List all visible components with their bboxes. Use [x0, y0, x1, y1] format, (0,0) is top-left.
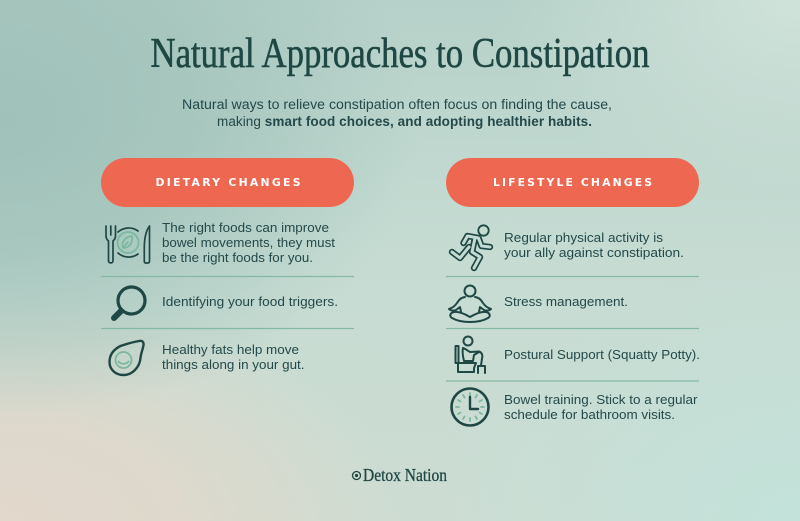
text: healthy fats: things along in your gut. — [162, 357, 304, 372]
text: healthy fats — [162, 342, 304, 372]
icon: clock — [452, 388, 488, 426]
text: physical activity: your ally against constipation. — [504, 245, 684, 260]
icon: plate with fork, knife and leaf — [106, 226, 150, 263]
panel: dietary changes — [101, 158, 354, 375]
text: physical activity — [504, 230, 684, 260]
heading pill: lifestyle changes: LIFESTYLE CHANGES — [493, 176, 652, 189]
text: healthy fats: Healthy fats help move — [162, 342, 299, 357]
heading pill: lifestyle changes — [446, 158, 699, 207]
icon: running person — [452, 225, 490, 268]
text: bowel training — [504, 392, 698, 422]
logo: Detox Nation — [363, 465, 447, 485]
text: right foods — [162, 220, 335, 265]
text: stress: Stress management. — [504, 294, 628, 309]
icon: meditating person — [449, 286, 491, 322]
heading pill: dietary changes — [101, 158, 354, 207]
icon: avocado — [110, 341, 144, 375]
intro text: Natural ways to relieve constipation often focus on finding the cause, — [182, 97, 612, 112]
intro text — [182, 97, 612, 129]
text: food triggers: Identifying your food triggers. — [162, 294, 338, 309]
title: Natural Approaches to Constipation — [150, 31, 650, 77]
text: right foods: bowel movements, they must — [162, 235, 335, 250]
panel: lifestyle changes — [446, 158, 700, 426]
text: bowel training: schedule for bathroom visits. — [504, 407, 675, 422]
heading pill: dietary changes: DIETARY CHANGES — [156, 176, 300, 189]
text: postural support: Postural Support (Squatty Potty). — [504, 347, 700, 362]
text: bowel training: Bowel training. Stick to a regular — [504, 392, 698, 407]
text: right foods: be the right foods for you. — [162, 250, 313, 265]
text: physical activity: Regular physical activity is — [504, 230, 663, 245]
text: right foods: The right foods can improve — [162, 220, 329, 235]
icon: person on squatty potty — [456, 336, 485, 373]
intro text: making smart food choices, and adopting healthier habits. — [217, 114, 592, 129]
icon: magnifying glass — [114, 287, 145, 318]
